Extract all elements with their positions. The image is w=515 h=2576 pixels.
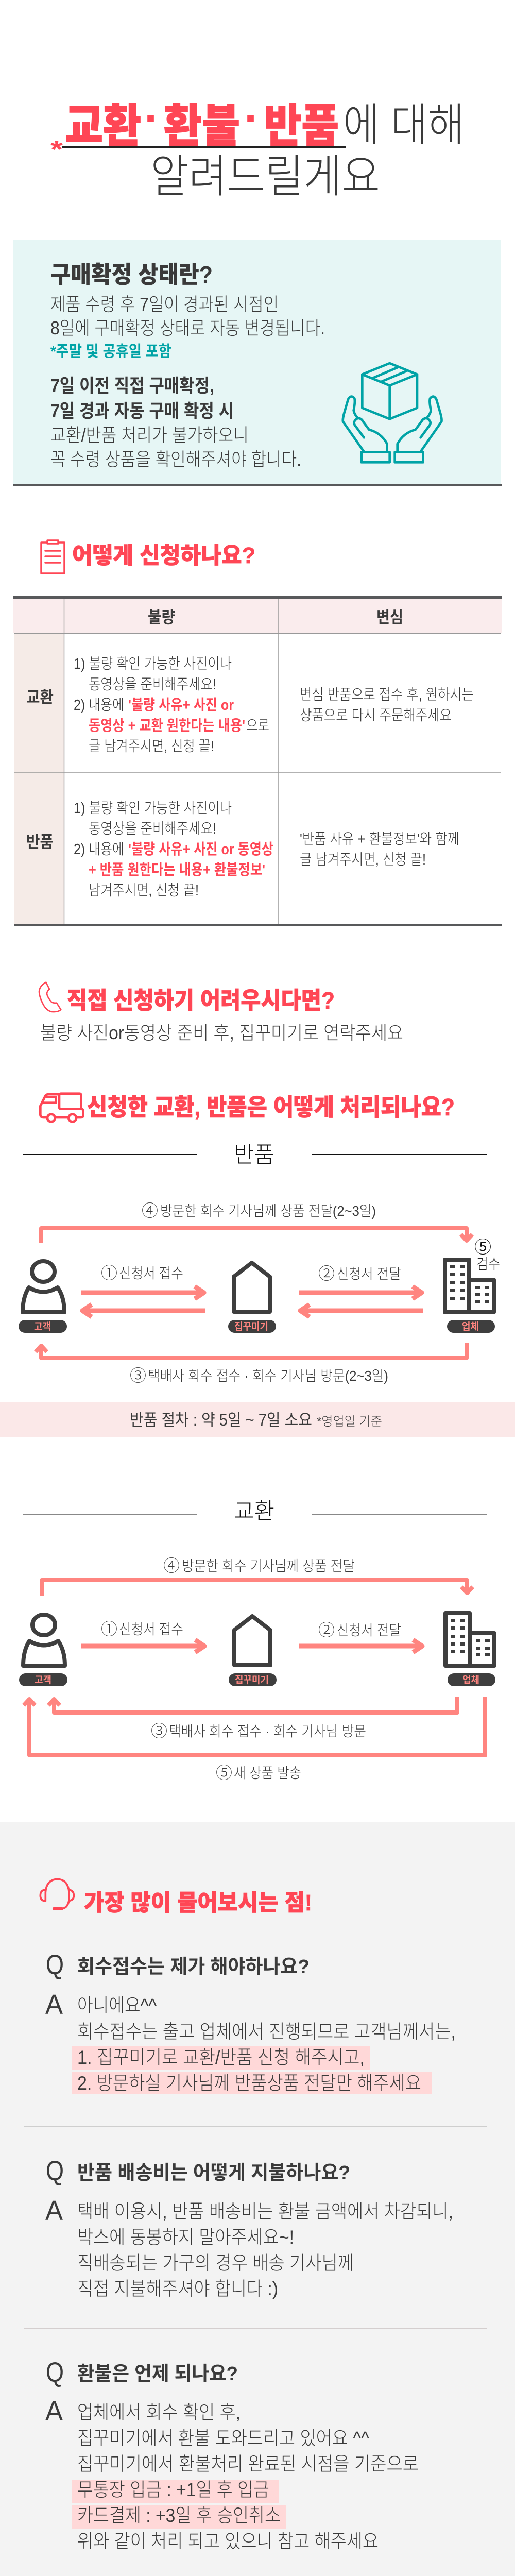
- icon: box in hands: [343, 363, 442, 462]
- icon: customer: 고객: [34, 1321, 51, 1332]
- banner: return period: 반품 절차 : 약 5일 ~ 7일 소요: [130, 1411, 312, 1429]
- panel: purchase confirmation: [13, 240, 502, 486]
- arrow: customer to shop: [81, 1620, 204, 1652]
- diagram: return process: ④: [142, 1201, 158, 1220]
- arrows: customer and shop: [81, 1264, 205, 1317]
- arrow: customer to shop: 신청서 접수: [119, 1621, 183, 1637]
- diagram: exchange process: 방문한 회수 기사님께 상품 전달: [182, 1558, 355, 1574]
- diagram: return process: ③: [130, 1366, 146, 1385]
- diagram: return process: 방문한 회수 기사님께 상품 전달(2~3일): [160, 1203, 376, 1219]
- table: exchange and return: 남겨주시면, 신청 끝!: [89, 883, 199, 899]
- icon: shop: 집꾸미기: [234, 1321, 268, 1332]
- icon: vendor: 업체: [462, 1674, 479, 1686]
- panel: purchase confirmation: 교환/반품 처리가 불가하오니: [50, 425, 249, 446]
- table: exchange and return: 2) 내용에: [74, 697, 124, 714]
- faq item 3: 무통장 입금 : +1일 후 입금: [77, 2479, 269, 2500]
- heading: FAQ: 가장 많이 물어보시는 점!: [84, 1890, 312, 1916]
- arrow: inner return: [48, 1697, 457, 1713]
- faq item 2: [45, 2156, 453, 2299]
- callout: direct application: [39, 982, 403, 1043]
- faq item 3: Q: [46, 2357, 64, 2388]
- faq item 2: 박스에 동봉하지 말아주세요~!: [77, 2227, 294, 2248]
- diagram: return process: ⑤: [474, 1238, 491, 1257]
- title: 에 대해: [343, 99, 465, 150]
- icon: customer: 고객: [35, 1674, 52, 1686]
- arrows: customer and shop: 신청서 접수: [119, 1265, 183, 1281]
- icon: shop: [228, 1263, 276, 1333]
- title: 교환: [65, 100, 141, 151]
- faq item 3: 위와 같이 처리 되고 있으니 참고 해주세요: [77, 2531, 379, 2552]
- table: exchange and return: 동영상 + 교환 원한다는 내용': [89, 717, 245, 734]
- arrow: shop to vendor: ②: [318, 1621, 335, 1639]
- icon: customer: [19, 1615, 67, 1686]
- callout: direct application: 직접 신청하기 어려우시다면?: [67, 987, 335, 1014]
- faq item 1: 회수접수는 출고 업체에서 진행되므로 고객님께서는,: [77, 2021, 456, 2042]
- faq item 1: 1. 집꾸미기로 교환/반품 신청 해주시고,: [77, 2047, 365, 2068]
- table: exchange and return: '반품 사유 + 환불정보'와 함께: [300, 831, 459, 848]
- faq item 2: 직배송되는 가구의 경우 배송 기사님께: [77, 2252, 354, 2274]
- arrow: shop to vendor: 신청서 전달: [337, 1622, 401, 1638]
- arrows: customer and shop: ①: [101, 1264, 117, 1282]
- diagram: exchange process: [19, 1556, 495, 1782]
- table: exchange and return: 상품으로 다시 주문해주세요: [300, 707, 452, 724]
- icon: shop: 집꾸미기: [235, 1674, 269, 1686]
- panel: purchase confirmation: 8일에 구매확정 상태로 자동 변경됩니다.: [50, 317, 325, 338]
- heading: how to apply: 어떻게 신청하나요?: [72, 543, 255, 568]
- panel: purchase confirmation: *주말 및 공휴일 포함: [50, 343, 171, 360]
- table: exchange and return: 글 남겨주시면, 신청 끝!: [300, 852, 426, 868]
- arrows: shop and vendor: 신청서 전달: [337, 1266, 401, 1282]
- faq item 2: Q: [46, 2156, 64, 2187]
- diagram: return process: 검수: [476, 1256, 500, 1272]
- table: exchange and return: 글 남겨주시면, 신청 끝!: [89, 738, 214, 755]
- table: exchange and return: '불량 사유+ 사진 or 동영상: [128, 841, 273, 858]
- arrow: customer to vendor: [42, 1580, 473, 1596]
- diagram: exchange process: 새 상품 발송: [234, 1765, 301, 1781]
- icon: shop: [229, 1616, 277, 1686]
- table: exchange and return: 교환: [26, 688, 54, 706]
- diagram: exchange process: ③: [151, 1722, 167, 1740]
- faq item 3: [45, 2357, 419, 2552]
- faq item 2: 직접 지불해주셔야 합니다 :): [77, 2278, 278, 2299]
- faq item 3: A: [45, 2396, 63, 2427]
- diagram: exchange process: ⑤: [216, 1764, 232, 1782]
- table: exchange and return: 으로: [246, 718, 269, 734]
- faq item 1: Q: [46, 1950, 64, 1980]
- title: 알려드릴게요: [150, 151, 380, 202]
- section title: exchange: 교환: [234, 1499, 274, 1524]
- heading: FAQ: [40, 1879, 312, 1916]
- section title: return: 반품: [234, 1142, 274, 1167]
- faq item 3: 카드결제 : +3일 후 승인취소: [77, 2505, 281, 2526]
- arrow: outer new item: [24, 1697, 485, 1755]
- icon: vendor: [445, 1613, 495, 1686]
- title: 환불: [164, 100, 240, 151]
- faq item 2: 반품 배송비는 어떻게 지불하나요?: [77, 2162, 350, 2184]
- faq item 2: A: [45, 2195, 63, 2226]
- heading: processing: 신청한 교환, 반품은 어떻게 처리되나요?: [87, 1094, 455, 1121]
- diagram: exchange process: 택배사 회수 접수 · 회수 기사님 방문: [169, 1723, 366, 1739]
- table: exchange and return: 1) 불량 확인 가능한 사진이나: [74, 800, 232, 817]
- table: exchange and return: 1) 불량 확인 가능한 사진이나: [74, 656, 232, 672]
- arrows: shop and vendor: [299, 1264, 423, 1317]
- panel: purchase confirmation: 구매확정 상태란?: [50, 261, 213, 288]
- diagram: exchange process: ④: [163, 1556, 180, 1575]
- table: exchange and return: 변심 반품으로 접수 후, 원하시는: [300, 687, 474, 703]
- faq item 2: 택배 이용시, 반품 배송비는 환불 금액에서 차감되니,: [77, 2201, 453, 2222]
- icon: phone: [39, 982, 61, 1012]
- banner: return period: *영업일 기준: [317, 1415, 382, 1429]
- banner: return period: [0, 1402, 515, 1437]
- panel: purchase confirmation: 꼭 수령 상품을 확인해주셔야 합니다.: [50, 449, 301, 470]
- table: exchange and return: 변심: [376, 608, 403, 626]
- icon: truck: [40, 1094, 83, 1122]
- table: exchange and return: '불량 사유+ 사진 or: [128, 697, 234, 714]
- icon: customer: [19, 1261, 67, 1333]
- diagram: return process: [19, 1201, 500, 1385]
- faq item 3: 환불은 언제 되나요?: [77, 2363, 238, 2385]
- table: exchange and return: [13, 596, 502, 926]
- table: exchange and return: 반품: [26, 833, 54, 851]
- panel: FAQ: [0, 1822, 515, 2576]
- icon: vendor: [445, 1260, 495, 1333]
- panel: purchase confirmation: 제품 수령 후 7일이 경과된 시점인: [50, 294, 279, 315]
- faq item 1: A: [45, 1989, 63, 2020]
- arrow: customer to shop: ①: [101, 1620, 117, 1638]
- faq item 1: [45, 1950, 456, 2094]
- faq item 3: 집꾸미기에서 환불 도와드리고 있어요 ^^: [77, 2428, 370, 2449]
- icon: vendor: 업체: [462, 1321, 479, 1332]
- faq item 1: 아니에요^^: [77, 1995, 157, 2016]
- faq item 1: 회수접수는 제가 해야하나요?: [77, 1956, 310, 1978]
- panel: purchase confirmation: 7일 이전 직접 구매확정,: [50, 375, 214, 396]
- arrow: vendor to customer: [36, 1343, 467, 1358]
- faq item 3: 집꾸미기에서 환불처리 완료된 시점을 기준으로: [77, 2453, 419, 2475]
- table: exchange and return: 동영상을 준비해주세요!: [89, 821, 216, 837]
- table: exchange and return: 2) 내용에: [74, 841, 124, 858]
- diagram: return process: 택배사 회수 접수 · 회수 기사님 방문(2~3일): [148, 1368, 388, 1384]
- heading: how to apply: [41, 540, 255, 573]
- table: exchange and return: + 반품 원한다는 내용+ 환불정보': [89, 861, 265, 878]
- callout: direct application: 불량 사진or동영상 준비 후, 집꾸미기로 연락주세요: [40, 1022, 403, 1043]
- arrow: shop to vendor: [299, 1621, 422, 1652]
- title: *: [50, 136, 63, 163]
- panel: purchase confirmation: 7일 경과 자동 구매 확정 시: [50, 400, 234, 421]
- title: 반품: [264, 100, 339, 151]
- faq item 1: 2. 방문하실 기사님께 반품상품 전달만 해주세요: [77, 2073, 421, 2094]
- table: exchange and return: 불량: [148, 608, 175, 626]
- title: ·: [144, 93, 160, 144]
- title: ·: [244, 93, 260, 144]
- title: [50, 93, 465, 202]
- faq item 3: 업체에서 회수 확인 후,: [77, 2402, 241, 2423]
- arrow: customer to vendor: [41, 1228, 472, 1243]
- table: exchange and return: 동영상을 준비해주세요!: [89, 676, 216, 693]
- arrows: shop and vendor: ②: [318, 1264, 335, 1283]
